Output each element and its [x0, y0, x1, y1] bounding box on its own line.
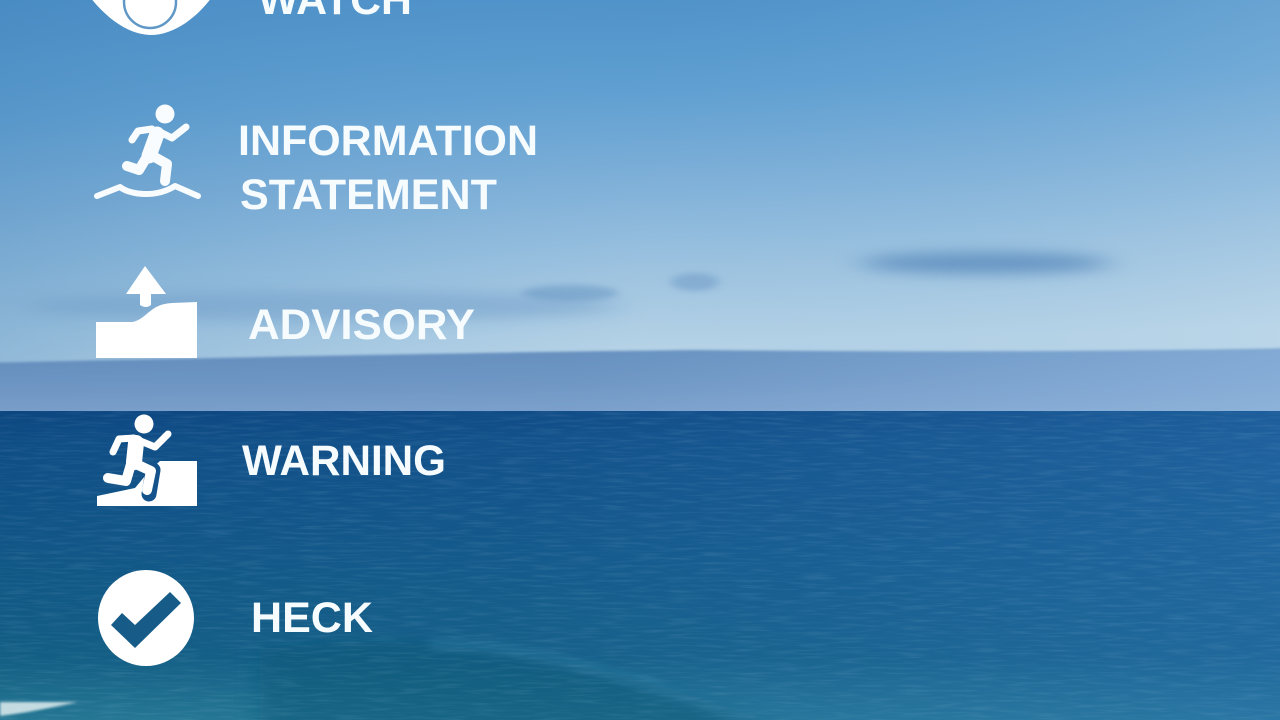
- icon: arrow up above higher ground: [96, 266, 197, 358]
- label: Warning: WARNING: [242, 437, 446, 485]
- icon: runner climbing to higher ground: [97, 414, 197, 506]
- row: Check: [98, 570, 373, 666]
- row: Information Statement: [97, 104, 538, 219]
- row: Warning: [97, 414, 446, 506]
- icon: eye: [90, 0, 212, 35]
- icon: check mark in circle: [98, 570, 194, 666]
- background: horizon haze band: [0, 348, 1280, 415]
- icon: runner on waves: [97, 104, 198, 196]
- background: ocean: [0, 411, 1280, 720]
- label: Statement: STATEMENT: [240, 171, 497, 219]
- label: Heck: HECK: [251, 594, 373, 642]
- background: sky: [0, 0, 1280, 365]
- label: Advisory: ADVISORY: [248, 301, 475, 349]
- row: Advisory: [96, 266, 475, 358]
- label: Information: INFORMATION: [238, 117, 538, 165]
- row: Watch: [90, 0, 412, 35]
